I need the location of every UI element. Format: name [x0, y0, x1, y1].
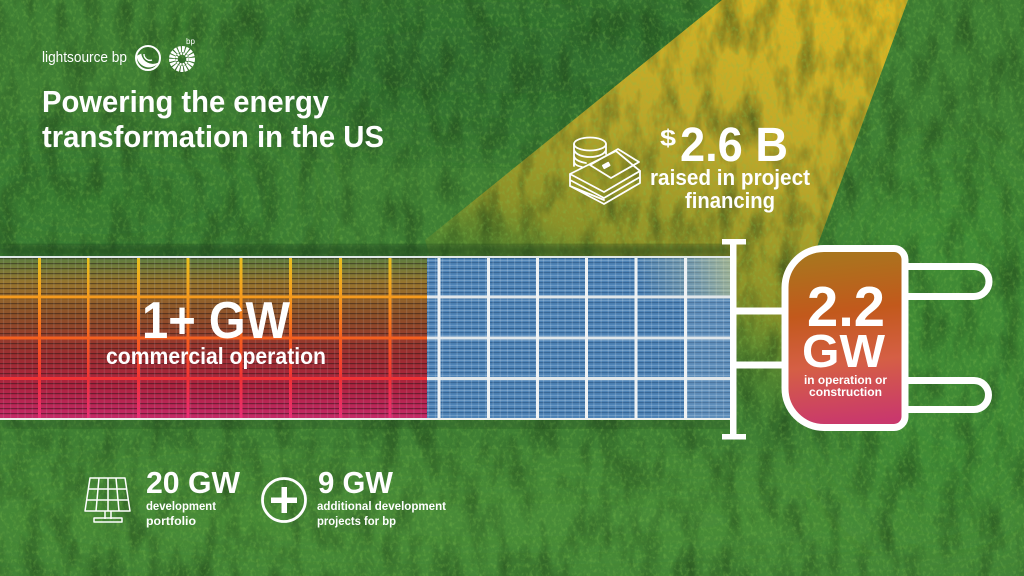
icon: plus	[262, 478, 306, 522]
logo: lightsource bp	[42, 37, 195, 70]
callout: 2.2 GW in operation or construction: GW	[802, 325, 886, 377]
stat: 20 GW development portfolio: portfolio	[146, 514, 196, 528]
icon: lightsource swirl	[136, 46, 160, 70]
plug body	[785, 248, 905, 428]
callout: 2.2 GW in operation or construction: in operation or	[804, 373, 887, 387]
icon: coins and cash	[570, 138, 640, 204]
title: transformation in the US	[42, 119, 384, 154]
wires	[735, 308, 785, 368]
title	[42, 84, 384, 154]
callout: 1+ GW commercial operation: commercial operation	[106, 343, 326, 369]
solar panel array	[0, 256, 733, 420]
logo: lightsource bp: lightsource bp	[42, 49, 127, 66]
title: Powering the energy	[42, 84, 330, 119]
panel: blue section	[427, 257, 733, 419]
callout: $2.6 B raised in project financing: financing	[685, 188, 775, 213]
callout: $2.6 B raised in project financing: raised in project	[650, 165, 811, 190]
stat: 9 GW additional development projects for bp: additional development	[317, 499, 446, 513]
bracket	[722, 239, 746, 440]
callout: 2.2 GW in operation or construction: construction	[809, 385, 882, 399]
stat: 20 GW development portfolio: 20 GW	[146, 465, 241, 500]
callout: 1+ GW commercial operation	[106, 292, 326, 369]
callout: 2.2 GW in operation or construction: 2.2	[807, 275, 885, 339]
stat: 20 GW development portfolio	[146, 465, 241, 528]
icon: solar panel	[85, 478, 130, 522]
icon: bp helios	[172, 49, 192, 69]
panel shadow	[0, 245, 733, 428]
stat: 9 GW additional development projects for bp: 9 GW	[318, 465, 394, 500]
stat: 9 GW additional development projects for bp	[317, 465, 446, 528]
panel: warm commercial section	[0, 257, 427, 419]
plug prongs	[905, 266, 989, 410]
callout: $2.6 B raised in project financing: $	[660, 125, 676, 151]
callout: $2.6 B raised in project financing: 2.6 B	[680, 119, 788, 172]
plug	[785, 248, 989, 428]
logo: lightsource bp: bp	[186, 37, 195, 46]
callout: 1+ GW commercial operation: 1+ GW	[142, 292, 291, 350]
stat: 20 GW development portfolio: development	[146, 499, 216, 513]
stat: 9 GW additional development projects for bp: projects for bp	[317, 514, 396, 528]
callout: 2.2 GW in operation or construction	[802, 275, 887, 399]
callout: $2.6 B raised in project financing	[650, 119, 811, 213]
yellow light beam	[425, 0, 908, 440]
